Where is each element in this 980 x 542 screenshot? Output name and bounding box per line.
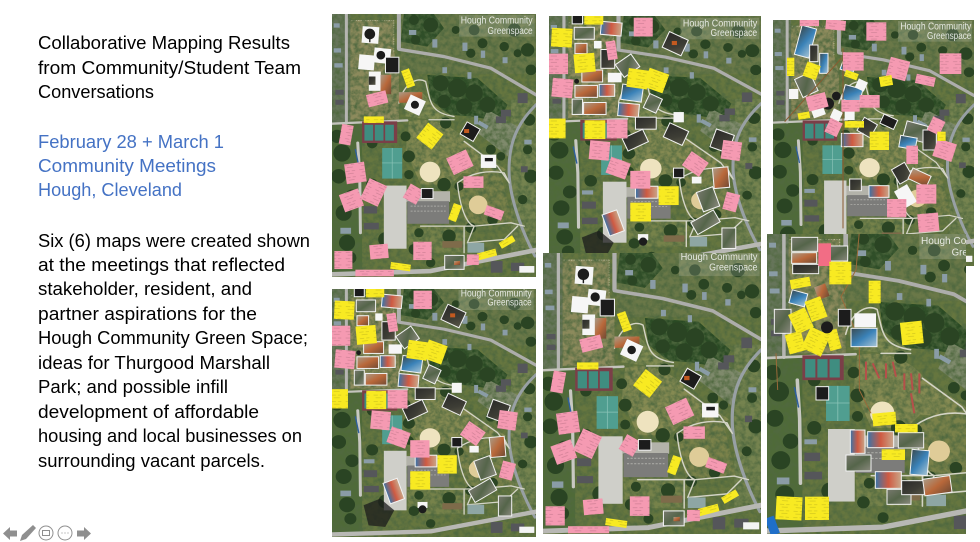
title: from Community/Student Team bbox=[38, 57, 301, 78]
map 5: bottom centre annotated aerial bbox=[543, 252, 761, 534]
map 2: top centre annotated aerial bbox=[549, 16, 761, 253]
body text: ideas for Thurgood Marshall bbox=[38, 352, 270, 373]
map title bbox=[679, 252, 760, 276]
subtitle: meeting dates and place: February 28 + March 1 bbox=[38, 131, 224, 152]
icon: slide view bbox=[39, 526, 53, 540]
body text: housing and local businesses on bbox=[38, 425, 302, 446]
stickers and photos on map 4 bbox=[332, 288, 518, 527]
yellow sticky notes on map 6 bbox=[775, 262, 924, 521]
icon: previous arrow bbox=[3, 527, 17, 540]
title bbox=[38, 32, 301, 102]
map title bbox=[458, 288, 534, 310]
map title bbox=[459, 15, 535, 37]
body text: stakeholder, resident, and bbox=[38, 278, 252, 299]
body text: Six (6) maps were created shown bbox=[38, 230, 310, 251]
map 6: bottom right annotated aerial, cropped bbox=[767, 234, 980, 534]
body text: Park; and possible infill bbox=[38, 376, 228, 397]
title: Conversations bbox=[38, 81, 154, 102]
icon: more options bbox=[58, 526, 72, 540]
map title bbox=[919, 234, 980, 259]
map 1: top left annotated aerial bbox=[332, 14, 536, 277]
map title bbox=[680, 18, 759, 39]
photos on map 6 bbox=[765, 237, 952, 536]
yellow sticky notes on map 3 bbox=[787, 58, 946, 150]
subtitle: meeting dates and place: Community Meetings bbox=[38, 155, 216, 176]
icon: pencil bbox=[20, 525, 36, 541]
body text: Hough Community Green Space; bbox=[38, 327, 308, 348]
red field scribble bbox=[866, 362, 919, 413]
body text bbox=[38, 230, 310, 471]
stickers and photos on map 2 bbox=[549, 15, 742, 260]
map 3: top right annotated aerial bbox=[773, 20, 974, 266]
route line bbox=[776, 232, 871, 413]
body text: surrounding vacant parcels. bbox=[38, 450, 265, 471]
pink sticky notes on map 3 bbox=[800, 19, 961, 233]
subtitle: meeting dates and place bbox=[38, 131, 224, 200]
stickers and photos on map 1 bbox=[334, 26, 516, 276]
photos and dots on map 3 bbox=[785, 25, 936, 228]
stickers and photos on map 5 bbox=[546, 266, 739, 533]
map 4: bottom left annotated aerial bbox=[332, 288, 536, 537]
body text: partner aspirations for the bbox=[38, 303, 257, 324]
black dot marker bbox=[821, 321, 833, 333]
icon: next arrow bbox=[77, 527, 91, 540]
title: Collaborative Mapping Results bbox=[38, 32, 290, 53]
body text: at the meetings that reflected bbox=[38, 254, 285, 275]
map title bbox=[898, 21, 972, 42]
subtitle: meeting dates and place: Hough, Cleveland bbox=[38, 179, 182, 200]
slideshow controls bbox=[3, 525, 91, 541]
body text: development of affordable bbox=[38, 401, 259, 422]
